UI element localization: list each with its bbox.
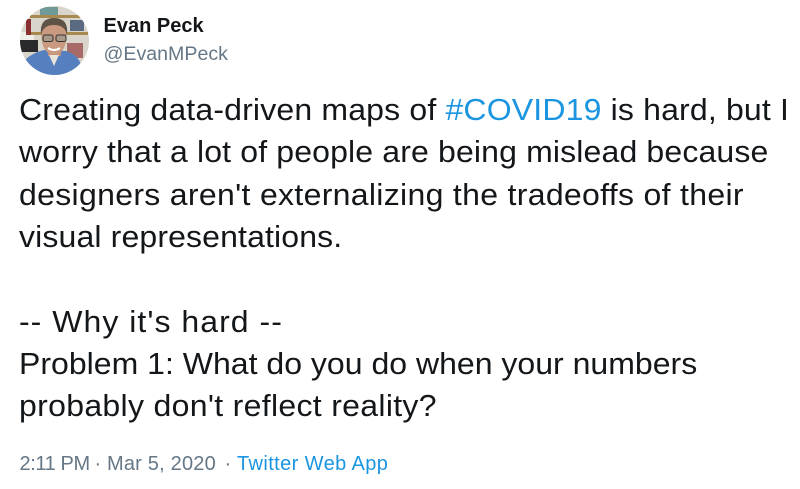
- icon: avatar photo: [20, 6, 89, 75]
- timestamp and source: Twitter Web App: [237, 453, 388, 475]
- timestamp and source: Mar 5, 2020: [107, 453, 216, 475]
- timestamp and source: ·: [94, 453, 101, 475]
- tweet text: probably don't reflect reality?: [19, 389, 437, 423]
- tweet text: Problem 1: What do you do when your numbers: [19, 347, 697, 381]
- tweet text: visual representations.: [19, 220, 342, 254]
- tweet text: Creating data-driven maps of #COVID19 is hard, but I: [19, 93, 789, 127]
- timestamp and source: [20, 453, 388, 475]
- timestamp and source: ·: [224, 453, 231, 475]
- tweet text: worry that a lot of people are being mislead because: [19, 135, 768, 169]
- tweet text: designers aren't externalizing the tradeoffs of their: [19, 178, 744, 212]
- timestamp and source: 2:11 PM: [20, 453, 90, 475]
- author name: Evan Peck: [104, 15, 204, 37]
- tweet text: -- Why it's hard --: [19, 305, 283, 339]
- author handle: @EvanMPeck: [104, 43, 228, 65]
